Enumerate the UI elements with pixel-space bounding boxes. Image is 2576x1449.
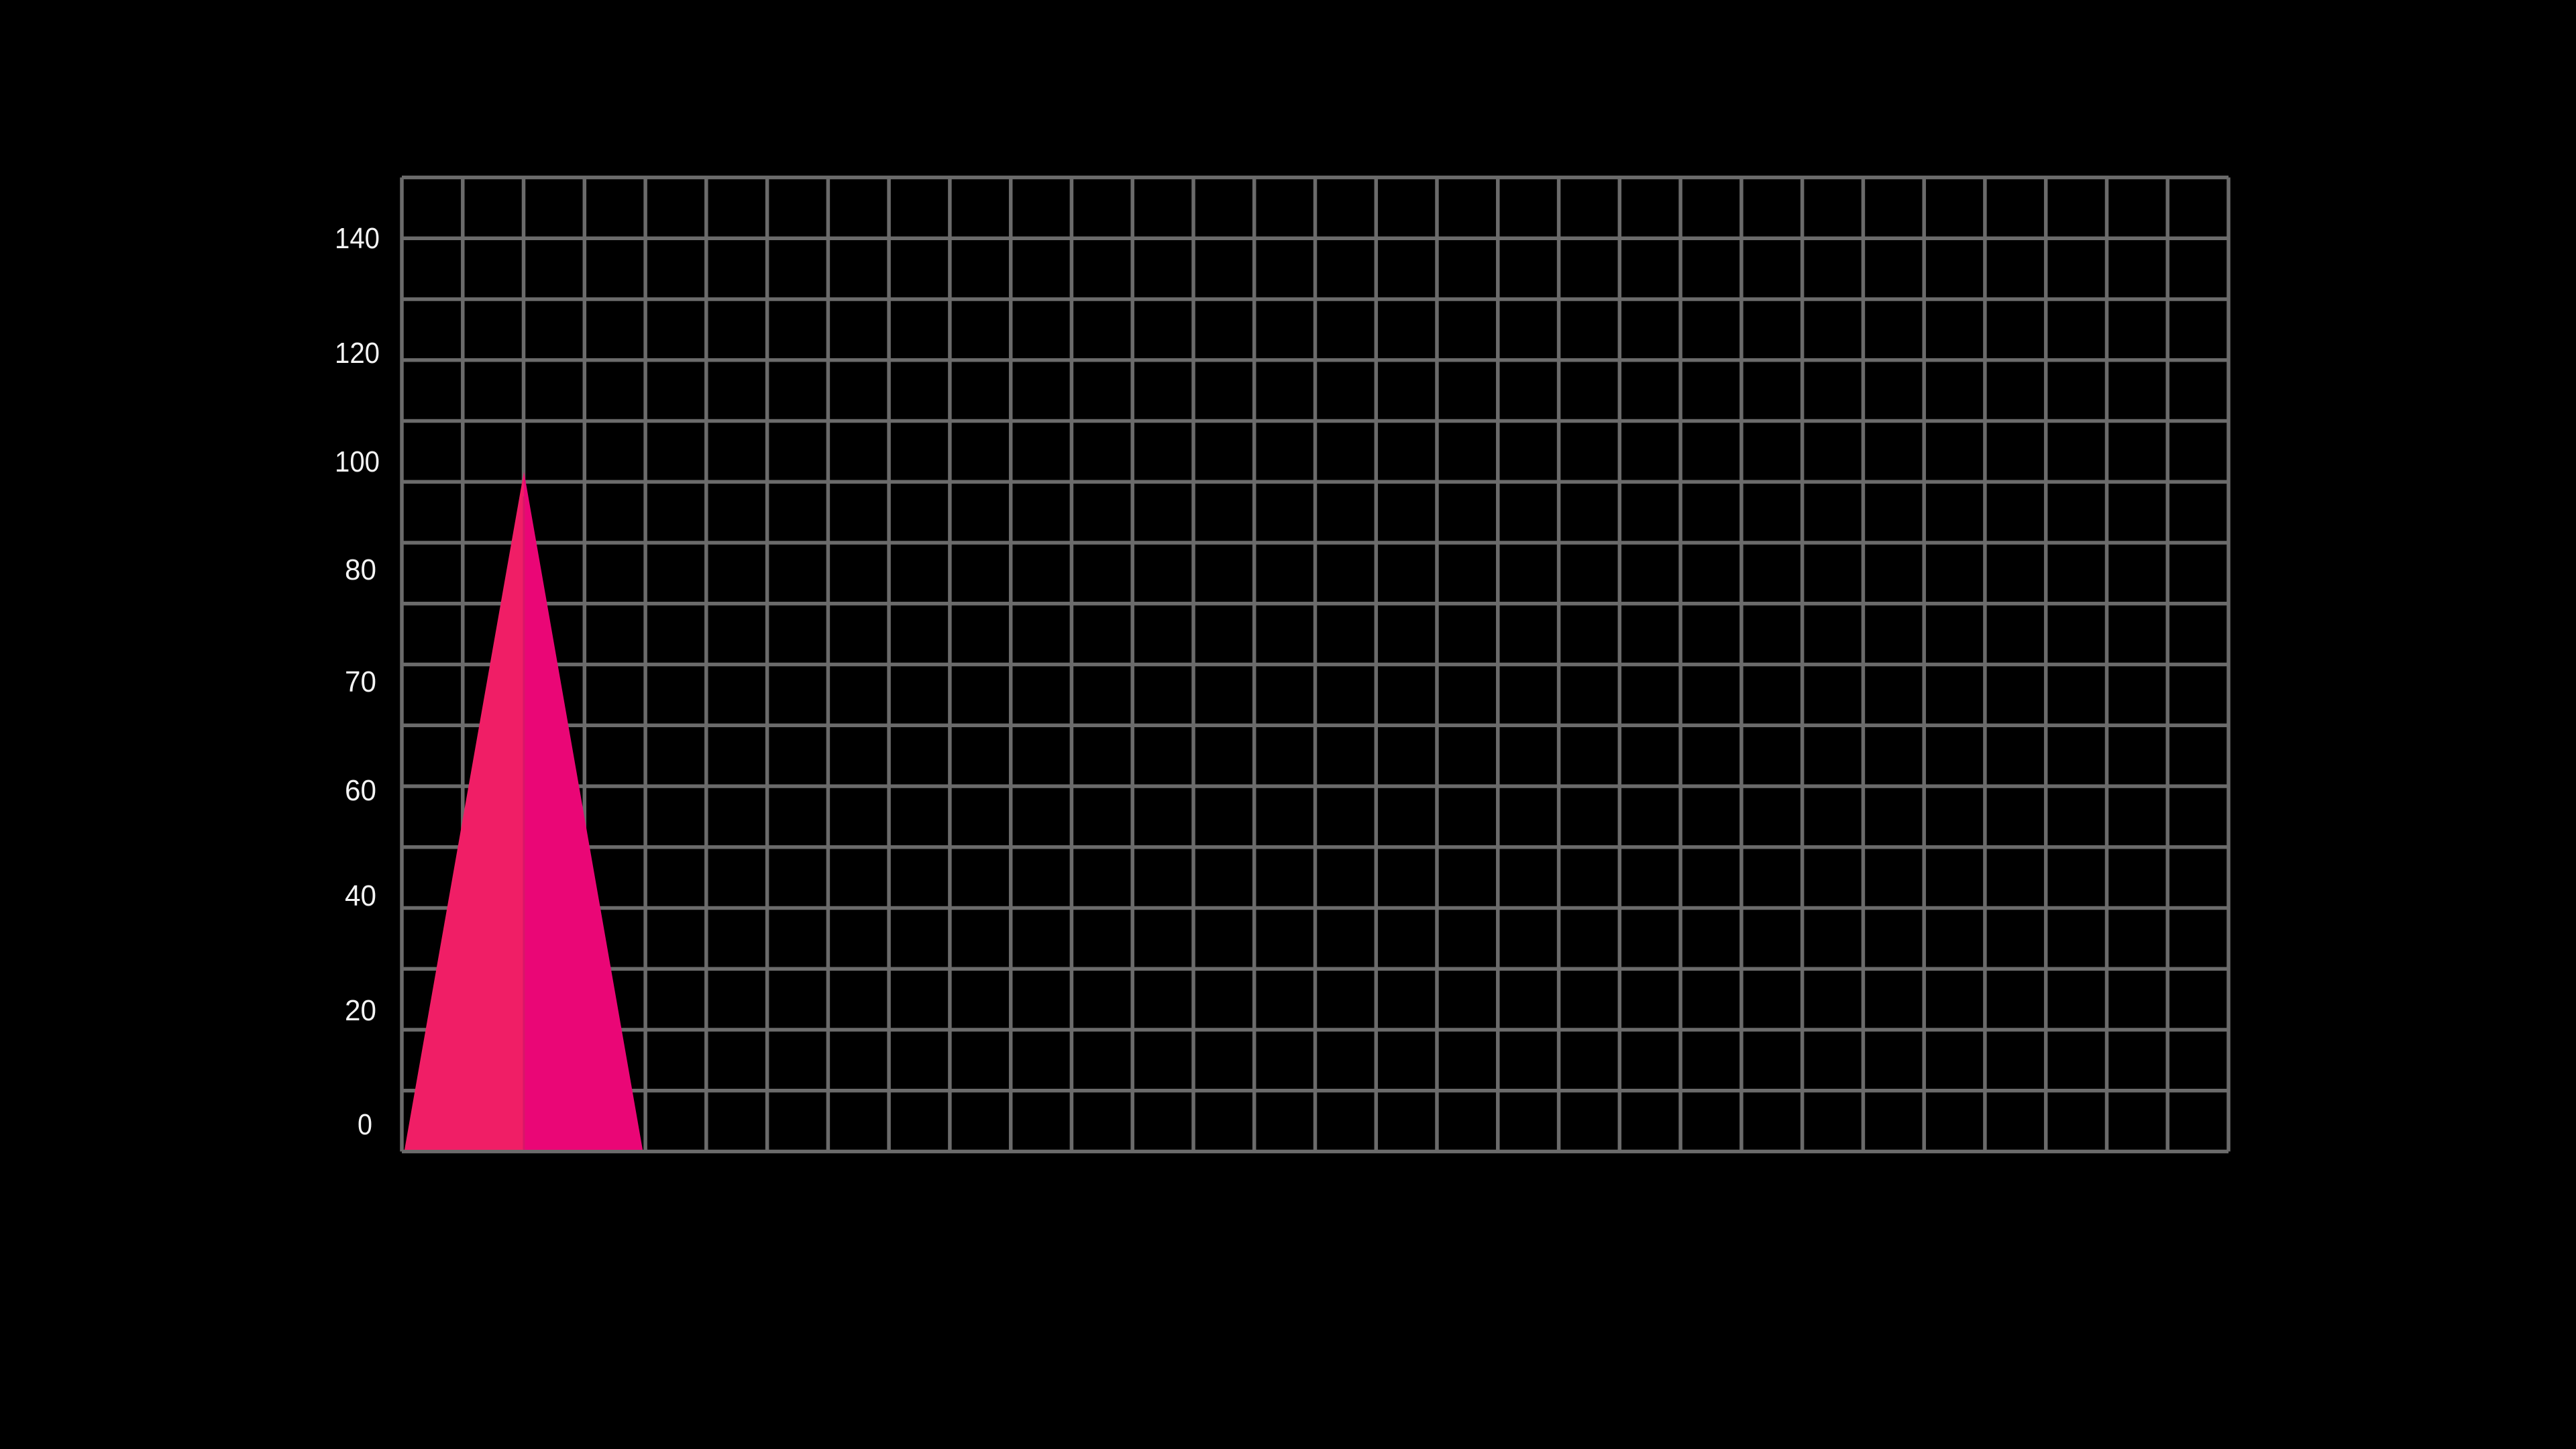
y-axis labels bbox=[335, 222, 380, 1141]
y-axis labels: 20 bbox=[345, 994, 376, 1027]
y-axis labels: 60 bbox=[345, 774, 376, 807]
triangle left face bbox=[405, 472, 524, 1150]
triangle right face bbox=[524, 472, 643, 1150]
y-axis labels: 100 bbox=[335, 445, 380, 478]
triangle centre ridge bbox=[523, 496, 525, 1150]
chart grid bbox=[402, 177, 2229, 1151]
y-axis labels: 140 bbox=[335, 222, 380, 255]
y-axis labels: 40 bbox=[345, 879, 376, 912]
y-axis labels: 0 bbox=[358, 1108, 372, 1141]
y-axis labels: 80 bbox=[345, 553, 376, 586]
triangle data mark bbox=[405, 472, 643, 1150]
y-axis labels: 120 bbox=[335, 337, 380, 370]
y-axis labels: 70 bbox=[345, 665, 376, 698]
